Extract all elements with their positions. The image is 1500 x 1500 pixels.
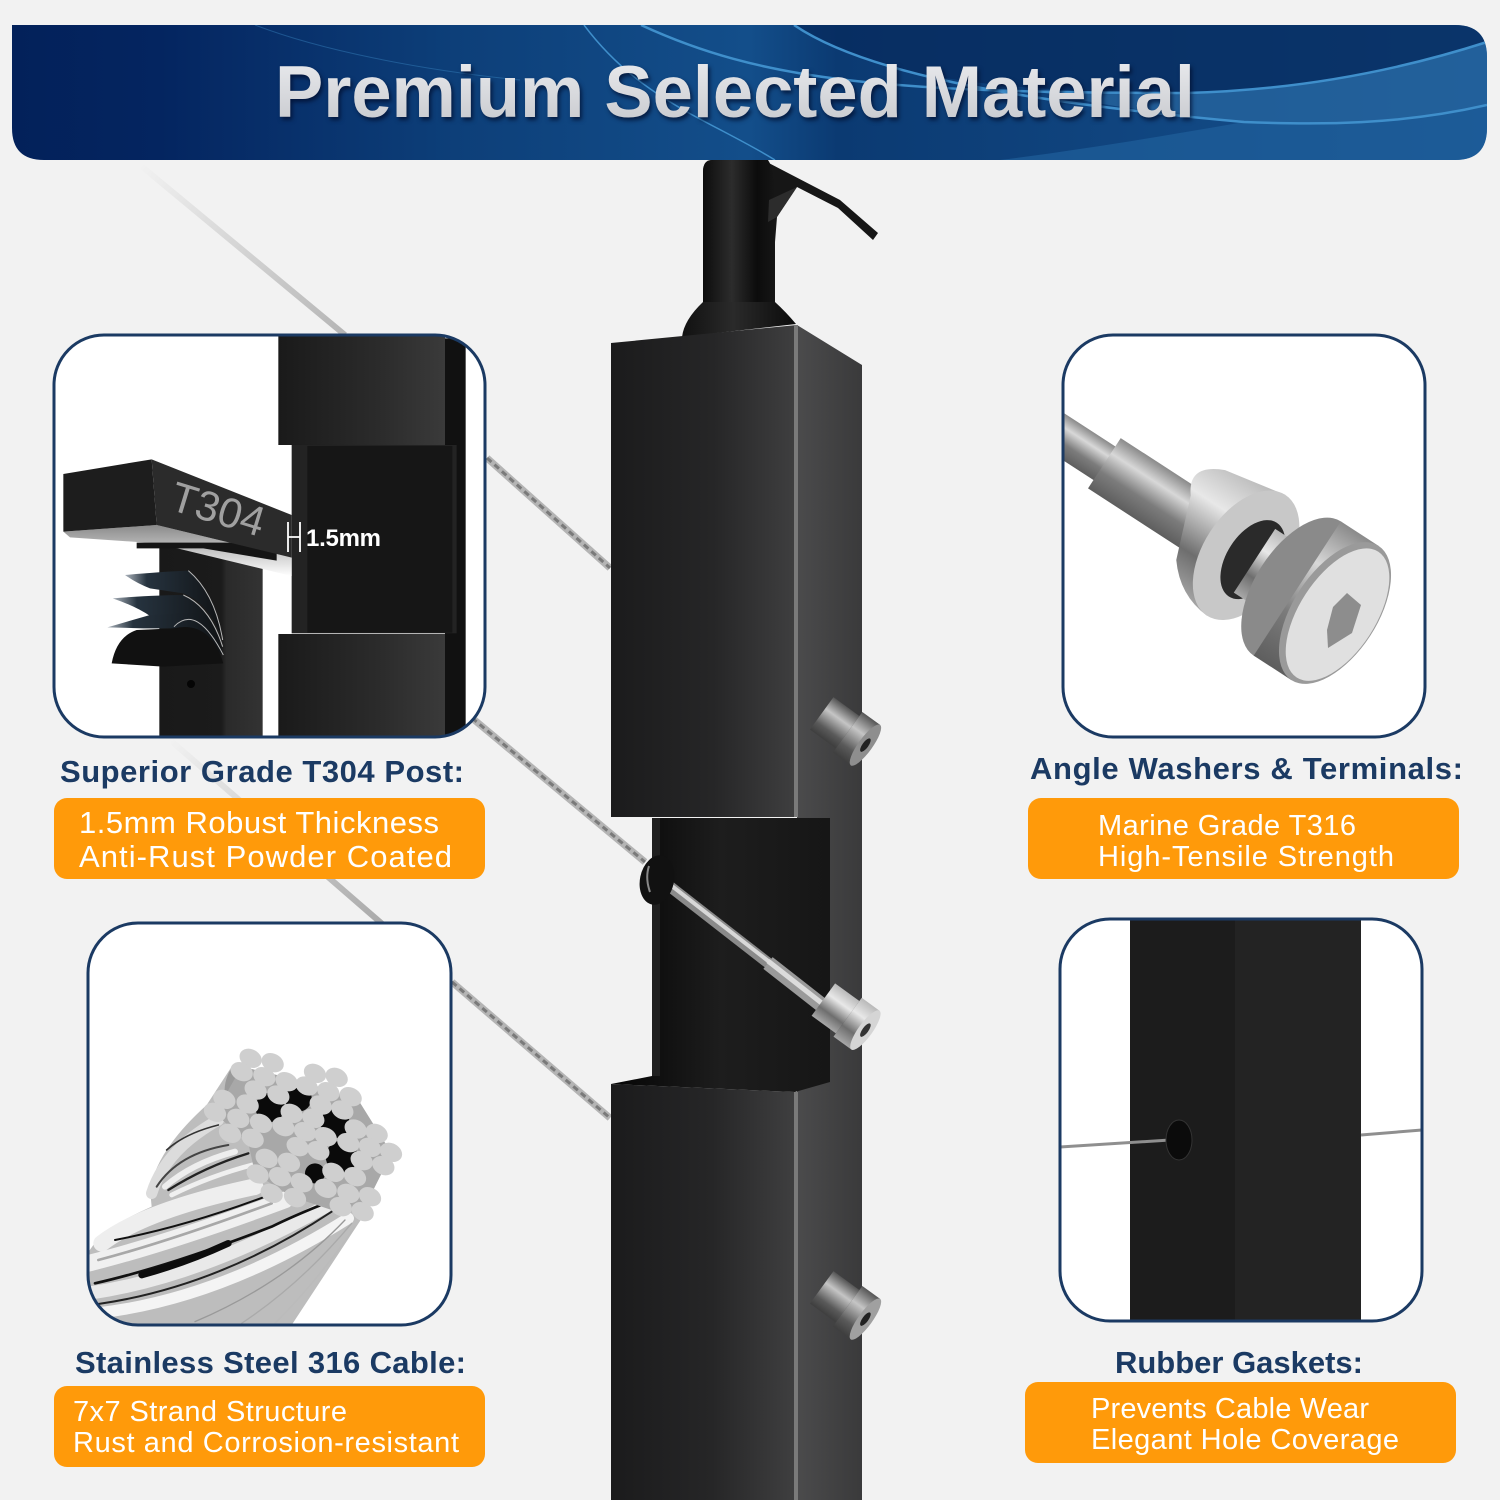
hex socket — [1327, 593, 1361, 648]
heading: gaskets: Rubber Gaskets: — [1115, 1345, 1363, 1380]
callout: terminals: High-Tensile Strength — [1098, 841, 1394, 873]
T304 engraving: T304 — [165, 473, 271, 546]
callout: cable: 7x7 Strand Structure — [73, 1396, 347, 1428]
terminal: middle — [809, 980, 885, 1054]
post top fitting — [682, 160, 878, 337]
callout: cable — [54, 1386, 485, 1467]
header banner — [12, 25, 1487, 160]
lower post section — [611, 1084, 798, 1500]
panel: T304 post — [54, 335, 485, 738]
panel: rubber gasket — [1060, 919, 1422, 1321]
callout: gaskets: Prevents Cable Wear — [1091, 1393, 1369, 1425]
callout: cable: Rust and Corrosion-resistant — [73, 1427, 459, 1459]
twisted strands — [85, 1067, 372, 1325]
steel cables behind the post — [140, 165, 645, 1118]
heading: cable: Stainless Steel 316 Cable: — [75, 1345, 466, 1380]
T304 post stem — [63, 525, 292, 737]
coating layers — [107, 571, 223, 667]
callout: terminals — [1028, 798, 1459, 879]
post cut-out interior — [611, 818, 830, 1092]
callout: terminals: Marine Grade T316 — [1098, 810, 1356, 842]
wire ends — [200, 1045, 406, 1225]
cable through gasket — [1060, 1120, 1422, 1160]
post cross-section — [278, 335, 466, 738]
heading: terminals: Angle Washers & Terminals: — [1030, 751, 1463, 786]
upper post section — [611, 325, 862, 1500]
callout: post: Anti-Rust Powder Coated — [79, 839, 452, 874]
callout: post — [54, 798, 485, 879]
callout: post: 1.5mm Robust Thickness — [79, 805, 439, 840]
callout: gaskets: Elegant Hole Coverage — [1091, 1424, 1399, 1456]
central black post — [611, 160, 886, 1500]
post faces — [1130, 919, 1361, 1321]
panel: 7x7 steel cable — [85, 923, 451, 1325]
angle washer — [1176, 469, 1300, 620]
gasket and cable rod — [635, 852, 828, 1010]
terminal: lower — [807, 1267, 886, 1343]
screw head — [1241, 518, 1391, 684]
terminal: upper — [807, 693, 886, 769]
heading: post: Superior Grade T304 Post: — [60, 754, 464, 789]
T304 top bar — [63, 459, 292, 558]
title: Premium Selected Material — [275, 52, 1195, 133]
cable shaft — [1064, 414, 1192, 548]
thickness mark: 1.5mm — [306, 525, 381, 552]
panel: terminal and washer — [1062, 334, 1426, 738]
strand gaps — [215, 1067, 392, 1210]
callout: gaskets — [1025, 1382, 1456, 1463]
